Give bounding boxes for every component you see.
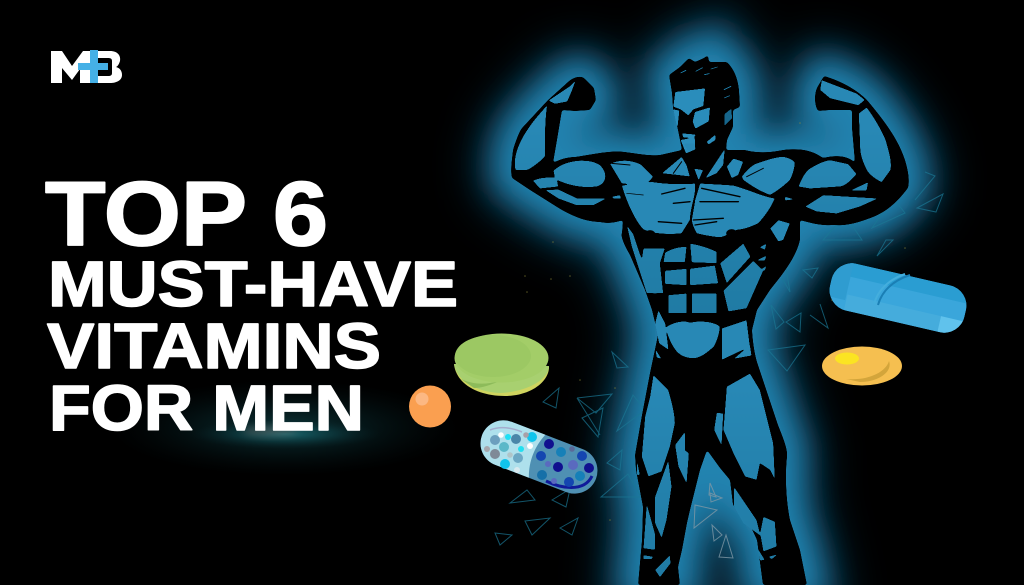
lower abdomen bbox=[655, 310, 752, 360]
pill: yellow softgel bbox=[822, 346, 902, 386]
glow: teal floor light under heading bbox=[110, 380, 460, 476]
hair highlights bbox=[680, 67, 732, 98]
particle dots bbox=[524, 122, 906, 521]
man: arms and abdominals bbox=[515, 80, 891, 313]
heading line: vitamins: VITAMINS bbox=[47, 310, 381, 382]
chest creases bbox=[612, 162, 763, 238]
glow: blue aura around the man bbox=[511, 55, 909, 585]
left arm bbox=[515, 80, 607, 205]
heading line: top 6: TOP 6 bbox=[45, 164, 328, 265]
right arm bbox=[798, 80, 891, 214]
pill: two-tone capsule with granules bbox=[474, 414, 604, 500]
heading line: must-have: MUST-HAVE bbox=[48, 248, 458, 320]
pill: orange ball bbox=[409, 386, 451, 428]
pill: round green tablet bbox=[454, 334, 549, 396]
face bbox=[673, 88, 732, 153]
man: chest and neck bbox=[610, 143, 795, 242]
man: black silhouette bbox=[511, 55, 909, 585]
title: heading text bbox=[45, 164, 458, 444]
triangles: low-poly particle network bbox=[495, 172, 943, 545]
logo: M+B bbox=[51, 50, 122, 83]
abdominals bbox=[627, 225, 767, 313]
right leg bbox=[714, 373, 778, 561]
pill: blue scored tablet bbox=[830, 263, 966, 333]
heading line: for men: FOR MEN bbox=[49, 372, 364, 444]
man: head details bbox=[673, 67, 732, 153]
man: lower body muscles bbox=[637, 310, 778, 577]
left leg bbox=[637, 375, 689, 577]
